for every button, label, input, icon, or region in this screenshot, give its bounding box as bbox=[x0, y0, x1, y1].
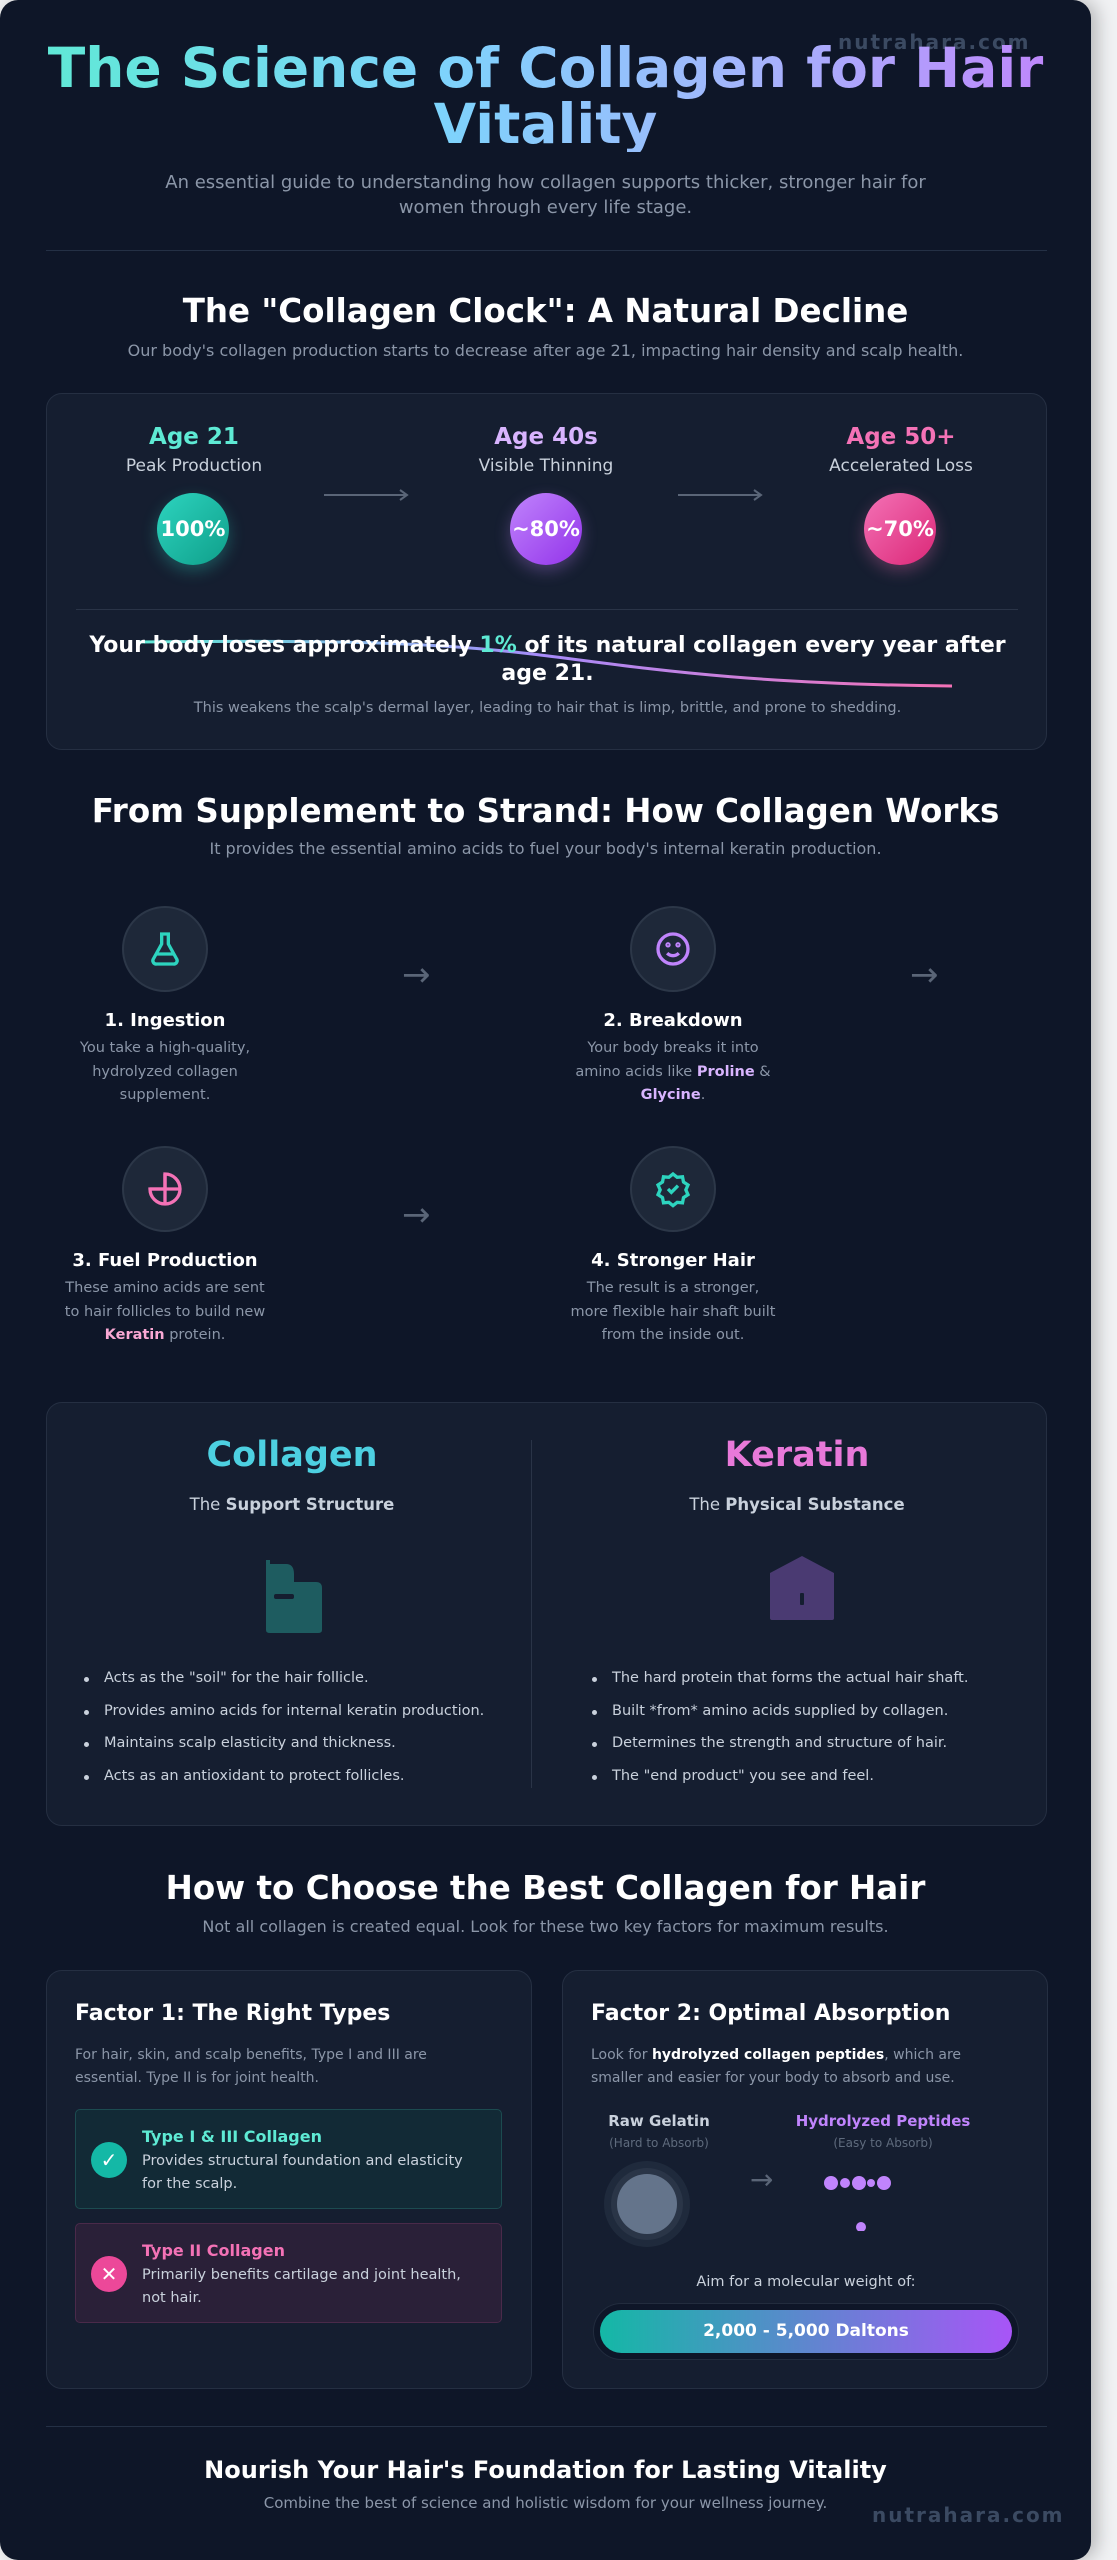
step 4: The result is a stronger, bbox=[587, 1280, 759, 1296]
footer title: Nourish Your Hair's Foundation for Lasting Vitality bbox=[204, 2456, 887, 2484]
factor 2 title: Factor 2: Optimal Absorption bbox=[591, 2001, 950, 2026]
arrow bbox=[324, 489, 408, 501]
step 4: 4. Stronger Hair bbox=[591, 1250, 755, 1271]
age 50+: Accelerated Loss bbox=[829, 456, 973, 476]
step 4: more flexible hair shaft built bbox=[571, 1304, 775, 1320]
icon: collagen bbox=[266, 1560, 322, 1633]
note: This weakens the scalp's dermal layer, leading to hair that is limp, brittle, and prone to shedding. bbox=[194, 700, 901, 716]
keratin column: Keratin bbox=[725, 1435, 869, 1475]
icon: keratin bbox=[770, 1556, 834, 1620]
step 3 bbox=[65, 1146, 265, 1343]
subheading: collagen clock: Our body's collagen production starts to decrease after age 21, impacting hair density and scalp health. bbox=[128, 341, 963, 360]
raw gelatin label: Raw Gelatin bbox=[608, 2112, 710, 2130]
circle 100%: 100% bbox=[161, 517, 225, 541]
title: Vitality bbox=[434, 92, 657, 156]
panel: factor 2 bbox=[562, 1970, 1048, 2389]
statement: Your body loses approximately 1% of its natural collagen every year after age 21. bbox=[89, 633, 1006, 686]
arrow: → bbox=[402, 955, 430, 995]
subheading: Not all collagen is created equal. Look for these two key factors for maximum results. bbox=[202, 1917, 889, 1936]
type II box: Primarily benefits cartilage and joint health, not hair. bbox=[142, 2267, 461, 2306]
peptides label: (Easy to Absorb) bbox=[833, 2136, 933, 2150]
step 1: You take a high-quality, bbox=[80, 1040, 250, 1056]
collagen column: Collagen bbox=[206, 1435, 378, 1475]
step 3: 3. Fuel Production bbox=[72, 1250, 258, 1271]
peptides label: Hydrolyzed Peptides bbox=[796, 2112, 970, 2130]
keratin column bbox=[689, 1435, 905, 1514]
step 4: from the inside out. bbox=[602, 1327, 744, 1343]
circle 80% bbox=[510, 493, 582, 565]
footer subtitle: Combine the best of science and holistic wisdom for your wellness journey. bbox=[264, 2494, 827, 2512]
factor 1 title: Factor 1: The Right Types bbox=[75, 2001, 390, 2026]
icon: gelatin molecule bbox=[604, 2161, 690, 2247]
collagen column bbox=[190, 1435, 394, 1514]
step 2: Glycine. bbox=[641, 1087, 705, 1103]
step 4 bbox=[571, 1146, 776, 1343]
type II box bbox=[75, 2223, 502, 2323]
circle 70%: ~70% bbox=[866, 517, 934, 541]
collagen bullets: Acts as the "soil" for the hair follicle. bbox=[104, 1670, 369, 1686]
panel: factor 1 bbox=[46, 1970, 532, 2389]
step 1: supplement. bbox=[120, 1087, 210, 1103]
arrow: → bbox=[402, 1195, 430, 1235]
type I & III box: Provides structural foundation and elasticity for the scalp. bbox=[142, 2153, 463, 2192]
factor 1 desc: For hair, skin, and scalp benefits, Type I and III are essential. Type II is for joint health. bbox=[75, 2047, 427, 2086]
step 2 bbox=[575, 906, 771, 1103]
circle 80%: ~80% bbox=[512, 517, 580, 541]
age 21: Age 21 bbox=[149, 424, 239, 450]
age 50+ bbox=[829, 424, 973, 476]
step 2: amino acids like Proline & bbox=[575, 1064, 771, 1080]
step 3: to hair follicles to build new bbox=[65, 1304, 265, 1320]
watermark bottom: nutrahara.com bbox=[872, 2503, 1065, 2527]
arrow bbox=[678, 489, 762, 501]
type I & III box: Type I & III Collagen bbox=[142, 2127, 322, 2146]
icon: cross bbox=[91, 2256, 127, 2292]
title: The Science of Collagen for Hair bbox=[48, 36, 1043, 100]
type II box: Type II Collagen bbox=[142, 2241, 285, 2260]
age 40s: Visible Thinning bbox=[479, 456, 613, 476]
heading: how to choose: How to Choose the Best Collagen for Hair bbox=[166, 1869, 925, 1907]
icon: check: ✓ bbox=[101, 2148, 117, 2172]
watermark top: nutrahara.com bbox=[838, 30, 1031, 54]
heading: how collagen works: From Supplement to Strand: How Collagen Works bbox=[92, 792, 999, 830]
step 3: These amino acids are sent bbox=[65, 1280, 265, 1296]
age 50+: Age 50+ bbox=[846, 424, 956, 450]
age 40s bbox=[478, 424, 613, 476]
step 2: Your body breaks it into bbox=[587, 1040, 759, 1056]
arrow: → bbox=[910, 955, 938, 995]
step 1: hydrolyzed collagen bbox=[92, 1064, 238, 1080]
age 21 bbox=[126, 424, 262, 476]
keratin bullets: The "end product" you see and feel. bbox=[612, 1768, 874, 1784]
keratin bullets bbox=[592, 1670, 968, 1784]
icon: cross: ✕ bbox=[101, 2262, 117, 2286]
circle 70% bbox=[864, 493, 936, 565]
age 21: Peak Production bbox=[126, 456, 262, 476]
type I & III box bbox=[75, 2109, 502, 2209]
step 2: 2. Breakdown bbox=[603, 1010, 743, 1031]
step 1 bbox=[80, 906, 250, 1103]
dalton bar: 2,000 - 5,000 Daltons bbox=[703, 2321, 909, 2341]
raw gelatin label: (Hard to Absorb) bbox=[609, 2136, 709, 2150]
dalton bar bbox=[593, 2303, 1019, 2360]
panel: collagen vs keratin bbox=[46, 1402, 1047, 1826]
step 3: Keratin protein. bbox=[105, 1327, 225, 1343]
subtitle: An essential guide to understanding how collagen supports thicker, stronger hair for women through every life stage. bbox=[165, 172, 926, 218]
raw gelatin label bbox=[608, 2112, 710, 2150]
factor 2 desc: Look for hydrolyzed collagen peptides, which are smaller and easier for your body to absorb and use. bbox=[591, 2047, 961, 2086]
arrow: → bbox=[750, 2163, 773, 2196]
step 1: 1. Ingestion bbox=[105, 1010, 225, 1031]
title bbox=[20, 40, 1071, 152]
aim text: Aim for a molecular weight of: bbox=[696, 2274, 916, 2290]
circle 100% bbox=[157, 493, 229, 565]
decline curve bbox=[140, 640, 952, 688]
keratin bullets: The hard protein that forms the actual hair shaft. bbox=[612, 1670, 968, 1686]
subheading: It provides the essential amino acids to fuel your body's internal keratin production. bbox=[209, 839, 882, 858]
icon: check bbox=[91, 2142, 127, 2178]
keratin bullets: Determines the strength and structure of hair. bbox=[612, 1735, 947, 1751]
collagen column: The Support Structure bbox=[190, 1495, 394, 1514]
icon: peptide dots bbox=[824, 2176, 891, 2231]
heading: collagen clock: The "Collagen Clock": A Natural Decline bbox=[183, 292, 908, 330]
panel: collagen clock bbox=[46, 393, 1047, 750]
collagen bullets: Provides amino acids for internal keratin production. bbox=[104, 1703, 484, 1719]
keratin column: The Physical Substance bbox=[689, 1495, 905, 1514]
age 40s: Age 40s bbox=[494, 424, 598, 450]
collagen bullets bbox=[84, 1670, 484, 1784]
collagen bullets: Acts as an antioxidant to protect follicles. bbox=[104, 1768, 405, 1784]
peptides label bbox=[796, 2112, 970, 2150]
keratin bullets: Built *from* amino acids supplied by collagen. bbox=[612, 1703, 948, 1719]
collagen bullets: Maintains scalp elasticity and thickness. bbox=[104, 1735, 396, 1751]
